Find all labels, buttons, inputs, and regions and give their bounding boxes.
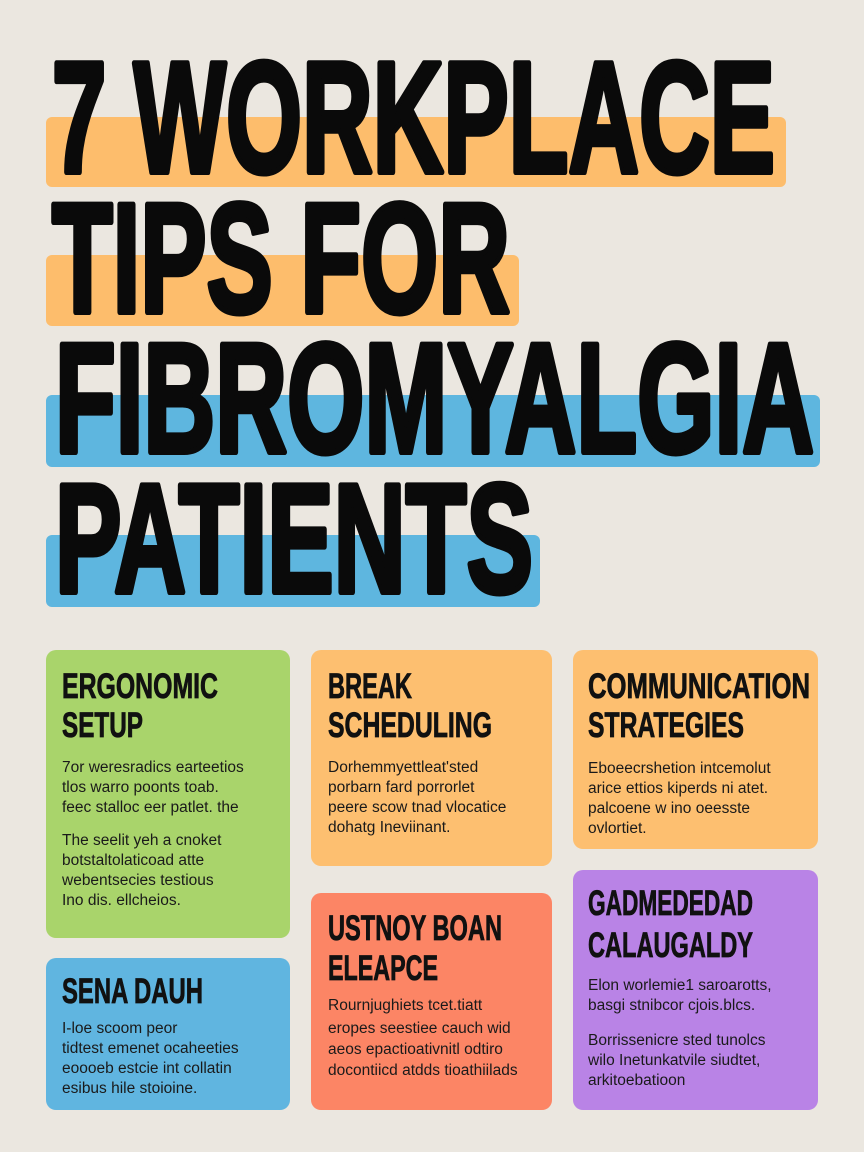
panel: communication strategies: STRATEGIES — [588, 706, 744, 745]
panel: gadmededad calaugaldy — [573, 870, 818, 1110]
panel: ergonomic setup: botstaltolaticoad atte — [62, 852, 204, 869]
panel: break scheduling: BREAK — [328, 667, 412, 706]
panel: gadmededad calaugaldy: Elon worlemie1 saroarotts, — [588, 977, 772, 994]
panel: ergonomic setup: ERGONOMIC — [62, 667, 218, 706]
panel: gadmededad calaugaldy: wilo Inetunkatvile siudtet, — [587, 1052, 760, 1069]
panel: break scheduling: dohatg Ineviinant. — [328, 819, 450, 836]
panel: communication strategies — [573, 650, 818, 849]
title — [46, 30, 820, 625]
panel: communication strategies: arice ettios kiperds ni atet. — [588, 780, 768, 797]
panel: break scheduling — [311, 650, 552, 866]
panel: ergonomic setup: The seelit yeh a cnoket — [62, 832, 222, 849]
panel: sena dauh: esibus hile stoioine. — [62, 1080, 197, 1097]
panel: ergonomic setup: webentsecies testious — [61, 872, 214, 889]
panel: sena dauh: I-loe scoom peor — [62, 1020, 177, 1037]
panel: sena dauh — [46, 958, 290, 1110]
panel: break scheduling: Dorhemmyettleat'sted — [328, 759, 478, 776]
panel: sena dauh: SENA DAUH — [62, 972, 203, 1011]
panel: communication strategies: Ebоеесrshetion intcemolut — [588, 760, 771, 777]
panel: ergonomic setup: SETUP — [62, 706, 143, 745]
panel: gadmededad calaugaldy: GADMEDEDAD — [588, 884, 753, 923]
panel: gadmededad calaugaldy: arkitoebatioon — [588, 1072, 685, 1089]
panel: ustnoy boan eleapce — [311, 893, 552, 1110]
panel: ustnoy boan eleapce: aeos epactioativnitl odtiro — [328, 1041, 503, 1058]
panel: ergonomic setup: feec stalloc eer patlet. the — [62, 799, 239, 816]
panel: sena dauh: tidtest emenet ocaheeties — [62, 1040, 239, 1057]
panel: gadmededad calaugaldy: Borrissenicre sted tunolcs — [588, 1032, 766, 1049]
panel: ustnoy boan eleapce: Rournjughiets tcet.tiatt — [328, 997, 483, 1014]
panel: ustnoy boan eleapce: ELEAPCE — [328, 949, 438, 988]
title: TIPS FOR — [52, 172, 510, 346]
panel: sena dauh: eoooeb estcie int collatin — [62, 1060, 232, 1077]
panel: ustnoy boan eleapce: USTNOY BOAN — [328, 909, 502, 948]
panel: ergonomic setup: tlos warro poonts toab. — [62, 779, 219, 796]
panel: communication strategies: ovlortiet. — [588, 820, 647, 837]
panel: communication strategies: palcoene w ino oeesste — [588, 800, 750, 817]
panel: ergonomic setup: 7or weresradics eartеetios — [62, 759, 244, 776]
panel: ergonomic setup — [46, 650, 290, 938]
title: PATIENTS — [55, 452, 533, 625]
panel: gadmededad calaugaldy: basgi stnibcor cjois.blcs. — [588, 997, 755, 1014]
panel: break scheduling: porbarn fard porrorlet — [328, 779, 475, 796]
panel: ustnoy boan eleapce: docontiicd atdds tioathiilads — [328, 1062, 518, 1079]
panel: break scheduling: peere scow tnad vlocatice — [328, 799, 506, 816]
panel: ustnoy boan eleapce: eropes seestiee cauch wid — [328, 1020, 511, 1037]
panel: gadmededad calaugaldy: CALAUGALDY — [588, 926, 753, 965]
panel: ergonomic setup: Ino dis. ellcheios. — [62, 892, 181, 909]
panel: break scheduling: SCHEDULING — [328, 706, 492, 745]
